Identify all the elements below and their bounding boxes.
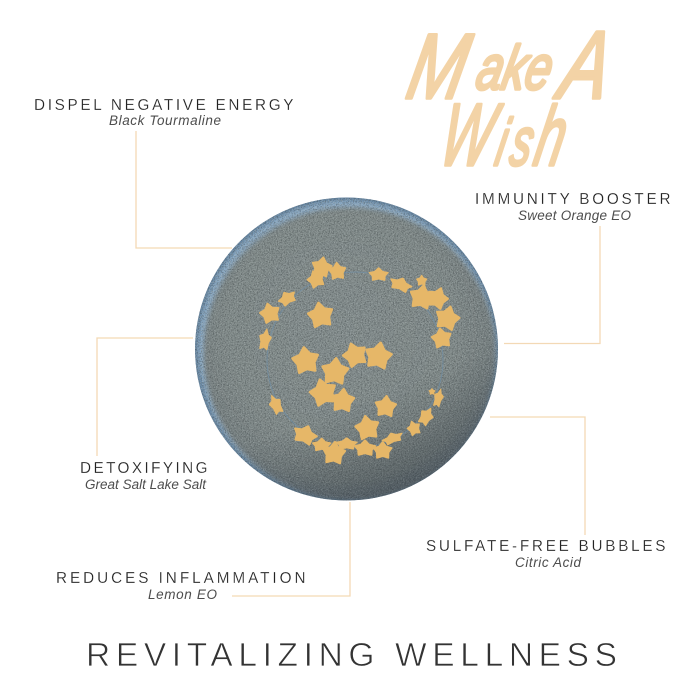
title: Make A Wish: i	[490, 105, 516, 179]
title: Make A Wish: M	[400, 16, 479, 118]
title: Make A Wish: ake	[471, 33, 560, 102]
label: Detoxifying	[80, 460, 208, 492]
connector: Sulfate-Free Bubbles	[490, 417, 585, 535]
connector: Detoxifying	[97, 338, 193, 456]
footer heading: REVITALIZING WELLNESS	[86, 637, 617, 674]
label: Sulfate-Free Bubbles: Citric Acid	[515, 555, 581, 570]
label: Reduces Inflammation: Lemon EO	[148, 587, 217, 602]
label: Sulfate-Free Bubbles: SULFATE-FREE BUBBLES	[426, 538, 666, 555]
label: Sulfate-Free Bubbles	[426, 538, 666, 570]
bath bomb	[195, 198, 499, 502]
label: Reduces Inflammation	[56, 570, 306, 602]
title: Make A Wish: s	[505, 104, 541, 181]
connector: Reduces Inflammation	[232, 502, 350, 596]
label: Detoxifying: DETOXIFYING	[80, 460, 208, 477]
label: Immunity Booster	[475, 191, 670, 223]
label: Immunity Booster: Sweet Orange EO	[518, 208, 631, 223]
gold stars	[258, 256, 461, 464]
label: Dispel Negative Energy: DISPEL NEGATIVE ENERGY	[34, 97, 294, 114]
label: Immunity Booster: IMMUNITY BOOSTER	[475, 191, 670, 208]
label: Detoxifying: Great Salt Lake Salt	[85, 477, 207, 492]
title: Make A Wish: W	[433, 85, 508, 184]
title: Make A Wish	[399, 12, 622, 184]
label: Reduces Inflammation: REDUCES INFLAMMATION	[56, 570, 306, 587]
title: Make A Wish: h	[528, 89, 576, 183]
label: Dispel Negative Energy	[34, 97, 294, 128]
label: Dispel Negative Energy: Black Tourmaline	[109, 113, 221, 128]
title: Make A Wish: A	[548, 12, 622, 119]
connector: Dispel Negative Energy	[136, 131, 232, 248]
connector: Immunity Booster	[504, 226, 600, 344]
